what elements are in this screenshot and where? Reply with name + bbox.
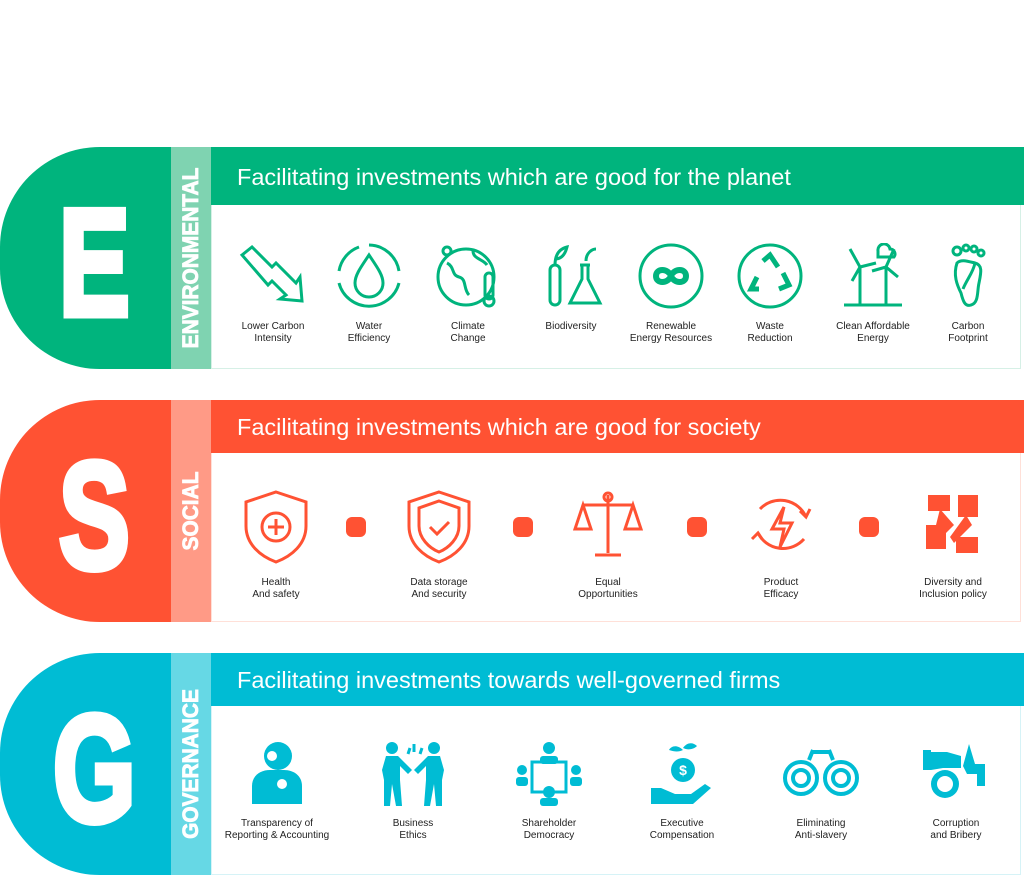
panel: environmental bbox=[0, 147, 1024, 369]
icon: data storage and security: And security bbox=[411, 589, 467, 600]
icon: clean affordable energy bbox=[836, 243, 910, 344]
dot bbox=[687, 517, 707, 537]
icon: eliminating anti-slavery bbox=[783, 749, 859, 841]
heading governance bbox=[211, 653, 1024, 706]
vertical label governance bbox=[171, 653, 211, 875]
letter block G: G bbox=[53, 684, 136, 854]
icon: renewable energy resources bbox=[630, 244, 712, 344]
icon: health and safety: And safety bbox=[252, 589, 300, 600]
icons row governance bbox=[211, 706, 1021, 875]
icon: renewable energy resources: Renewable bbox=[646, 321, 696, 332]
icon: corruption and bribery: Corruption bbox=[933, 818, 979, 829]
icon: business ethics: Business bbox=[393, 818, 433, 829]
icon: executive compensation: Compensation bbox=[650, 830, 714, 841]
icon: business ethics: Ethics bbox=[399, 830, 427, 841]
letter block E: E bbox=[59, 178, 130, 348]
icon: biodiversity bbox=[545, 245, 602, 332]
icon: clean affordable energy: Energy bbox=[857, 333, 889, 344]
icons row social bbox=[211, 453, 1021, 622]
icon: carbon footprint: Footprint bbox=[948, 333, 988, 344]
icon: waste reduction bbox=[738, 244, 802, 344]
icon: data storage and security bbox=[408, 490, 470, 600]
panel: governance: GOVERNANCE bbox=[178, 689, 203, 839]
icon: biodiversity: Biodiversity bbox=[545, 321, 597, 332]
icon: equal opportunities bbox=[573, 492, 643, 600]
icon: corruption and bribery bbox=[923, 744, 985, 841]
icon: equal opportunities: Opportunities bbox=[578, 589, 638, 600]
dot bbox=[513, 517, 533, 537]
icon: executive compensation: $ bbox=[679, 762, 687, 778]
icon: corruption and bribery: and Bribery bbox=[930, 830, 982, 841]
icon: executive compensation: Executive bbox=[660, 818, 704, 829]
icon: transparency of reporting: Reporting & Accounting bbox=[225, 830, 329, 841]
icon: carbon footprint bbox=[948, 244, 988, 344]
icon: waste reduction: Waste bbox=[756, 321, 784, 332]
icon: shareholder democracy bbox=[516, 742, 582, 841]
icon: transparency of reporting bbox=[225, 742, 329, 841]
icon: renewable energy resources: Energy Resources bbox=[630, 333, 712, 344]
icon: executive compensation bbox=[650, 743, 714, 841]
icon: climate change bbox=[436, 246, 496, 344]
icon: diversity and inclusion policy: Inclusion policy bbox=[919, 589, 987, 600]
icon: water efficiency: Efficiency bbox=[348, 333, 390, 344]
letter block G bbox=[0, 653, 171, 875]
icon: product efficacy: Product bbox=[764, 577, 798, 588]
letter block S bbox=[0, 400, 171, 622]
icon: water efficiency bbox=[338, 244, 400, 344]
icon: waste reduction: Reduction bbox=[747, 333, 793, 344]
icon: business ethics bbox=[382, 742, 444, 841]
icon: equal opportunities: Equal bbox=[595, 577, 621, 588]
icons row environmental bbox=[211, 205, 1021, 369]
icon: carbon footprint: Carbon bbox=[952, 321, 984, 332]
panel: social bbox=[0, 400, 1024, 622]
dot bbox=[346, 517, 366, 537]
heading social bbox=[211, 400, 1024, 453]
icon: health and safety: Health bbox=[262, 577, 290, 588]
icon: climate change: Change bbox=[450, 333, 486, 344]
heading environmental bbox=[211, 147, 1024, 205]
icon: lower carbon intensity: Intensity bbox=[254, 333, 292, 344]
icon: climate change: Climate bbox=[451, 321, 485, 332]
panel: governance bbox=[0, 653, 1024, 875]
icon: lower carbon intensity: Lower Carbon bbox=[242, 321, 304, 332]
icon: health and safety bbox=[244, 490, 308, 600]
icon: lower carbon intensity bbox=[240, 245, 304, 344]
icon: data storage and security: Data storage bbox=[410, 577, 468, 588]
heading governance: Facilitating investments towards well-governed firms bbox=[237, 667, 780, 693]
heading environmental: Facilitating investments which are good for the planet bbox=[237, 164, 791, 190]
icon: product efficacy: Efficacy bbox=[764, 589, 798, 600]
icon: diversity and inclusion policy bbox=[919, 495, 987, 600]
heading social: Facilitating investments which are good for society bbox=[237, 414, 761, 440]
icon: eliminating anti-slavery: Eliminating bbox=[797, 818, 845, 829]
dot bbox=[859, 517, 879, 537]
letter block E bbox=[0, 147, 171, 369]
letter block S: S bbox=[59, 431, 130, 601]
icon: eliminating anti-slavery: Anti-slavery bbox=[795, 830, 847, 841]
vertical label social bbox=[171, 400, 211, 622]
icon: shareholder democracy: Democracy bbox=[524, 830, 574, 841]
panel: social: SOCIAL bbox=[178, 472, 203, 550]
icon: shareholder democracy: Shareholder bbox=[522, 818, 576, 829]
icon: clean affordable energy: Clean Affordable bbox=[836, 321, 910, 332]
icon: water efficiency: Water bbox=[356, 321, 382, 332]
icon: product efficacy bbox=[751, 498, 812, 600]
vertical label environmental bbox=[171, 147, 211, 369]
panel: environmental: ENVIRONMENTAL bbox=[178, 168, 203, 348]
icon: transparency of reporting: Transparency of bbox=[241, 818, 313, 829]
icon: diversity and inclusion policy: Diversity and bbox=[924, 577, 982, 588]
